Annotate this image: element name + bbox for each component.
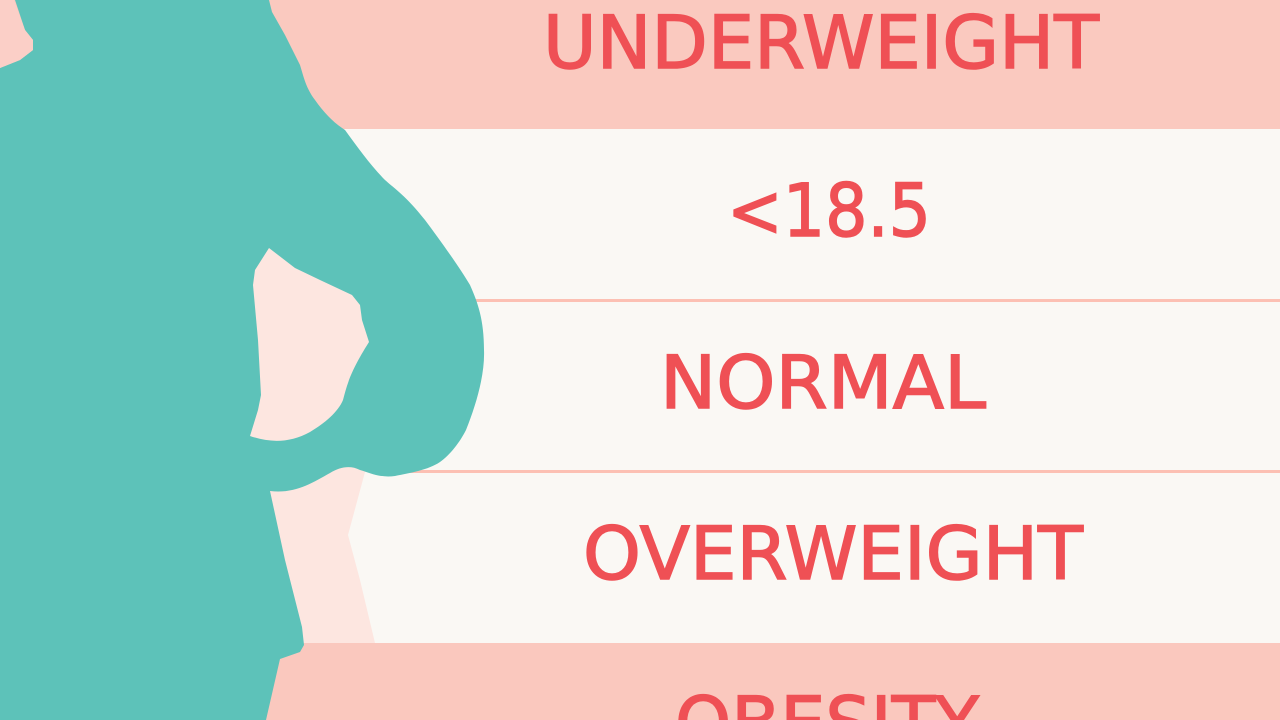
- label: normal: NORMAL: [660, 341, 986, 426]
- label: overweight: OVERWEIGHT: [583, 512, 1083, 597]
- icon: body silhouette: [0, 0, 484, 720]
- label: underweight: UNDERWEIGHT: [543, 1, 1099, 86]
- band: value and normal rows: [0, 129, 1280, 643]
- label: underweight value: <18.5: [727, 169, 931, 254]
- band: obesity: [0, 643, 1280, 720]
- shape: top left corner background: [0, 0, 33, 68]
- band: underweight: [0, 0, 1280, 129]
- background shape: light area behind figure: [250, 240, 375, 643]
